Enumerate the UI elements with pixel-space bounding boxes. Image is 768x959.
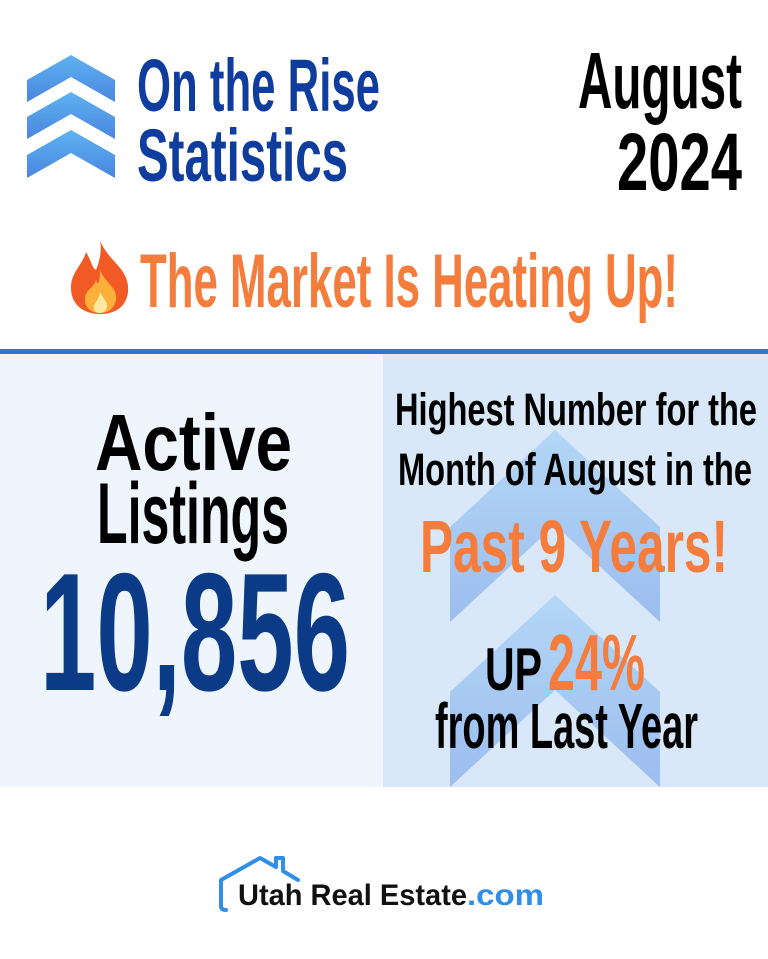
icon: logo chevrons bbox=[27, 55, 115, 178]
title: Statistics bbox=[137, 114, 348, 197]
logo: Utah Real Estate: .com bbox=[467, 879, 544, 912]
panel: active listings: Listings bbox=[97, 466, 289, 562]
title: On the Rise bbox=[137, 44, 380, 127]
icon: fire bbox=[71, 240, 128, 314]
panel: active listings: Active bbox=[95, 398, 292, 487]
panel: active listings: 10,856 bbox=[40, 538, 350, 726]
panel: active listings bbox=[0, 354, 383, 787]
panel: highest number: UP bbox=[485, 636, 542, 703]
logo: Utah Real Estate: Utah Real Estate bbox=[238, 879, 467, 912]
logo: Utah Real Estate bbox=[221, 858, 544, 912]
panel: highest number bbox=[383, 354, 768, 787]
icon: background chevrons bbox=[450, 430, 660, 787]
panel: highest number: 24% bbox=[548, 618, 645, 707]
title bbox=[137, 44, 380, 197]
date bbox=[578, 36, 742, 208]
